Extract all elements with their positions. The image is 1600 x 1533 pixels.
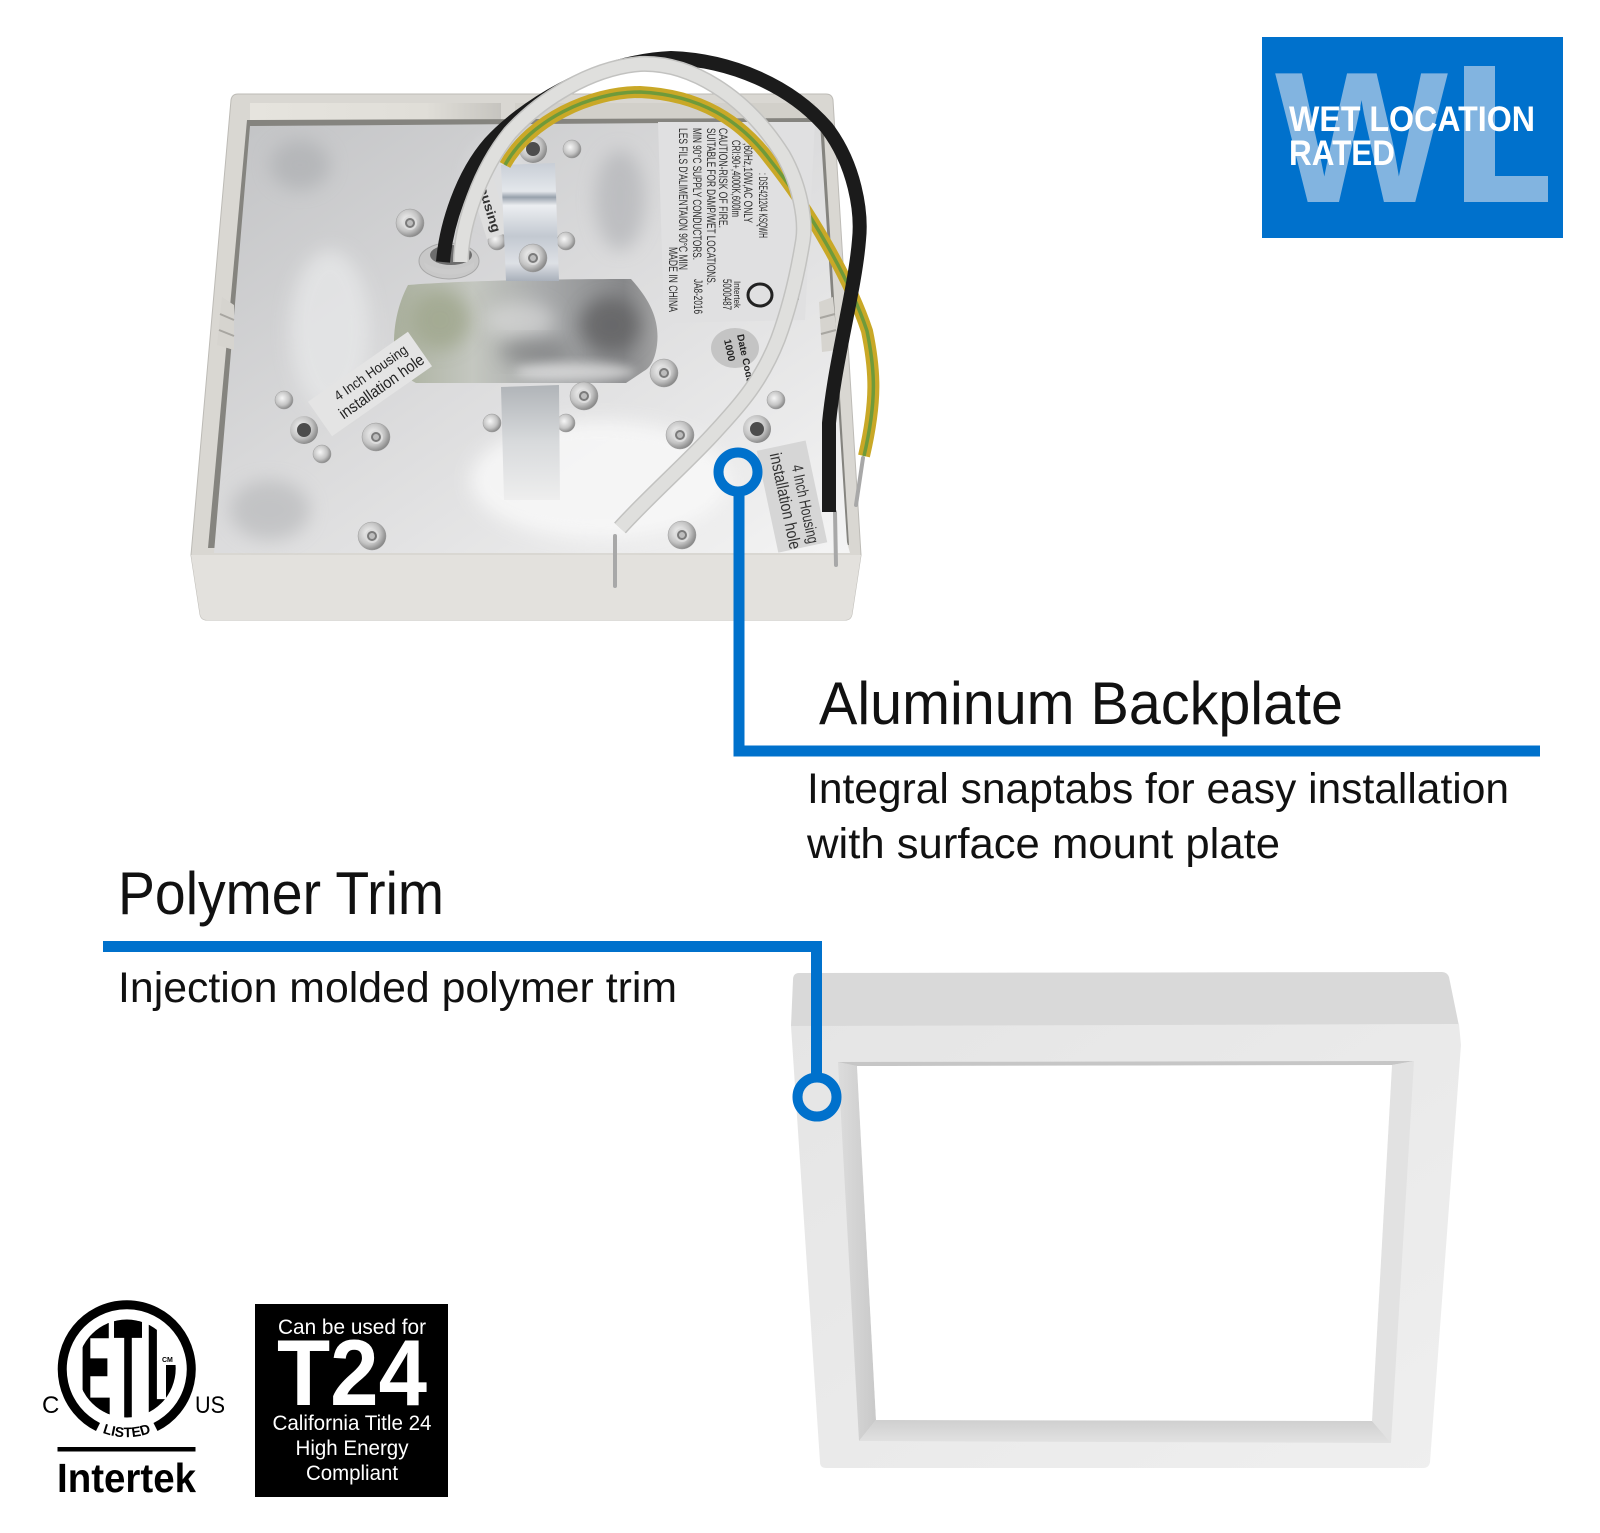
text block: trim description: Injection molded polymer trim (118, 964, 677, 1012)
sticker: partly hidden housing label (468, 171, 510, 239)
printed product label: 5000487 (720, 279, 732, 310)
inner bevel right (1372, 1061, 1414, 1443)
badge: California Title 24: Can be used for (278, 1315, 426, 1339)
badge: wet location rated: RATED (1289, 134, 1395, 173)
text block: backplate description (806, 765, 1509, 868)
printed product label: JA8-2016 (691, 279, 703, 314)
C mark: C (42, 1392, 59, 1419)
recessed opening in the plate (394, 279, 658, 383)
printed product label: ,60Hz,10W,AC ONLY (741, 143, 753, 223)
badge: ETL listed Intertek: L (146, 1292, 176, 1446)
heading: Polymer Trim: Polymer Trim (118, 860, 444, 927)
rivets (275, 135, 785, 550)
badge: wet location rated: L (1464, 33, 1548, 242)
inner bevel left (838, 1062, 876, 1441)
wire: green and yellow ground (505, 92, 873, 456)
sticker: right installation hole label: installation hole (766, 451, 805, 551)
ETL ring (62, 1305, 191, 1427)
US mark: US (195, 1392, 225, 1419)
badge: wet location rated: W (1275, 33, 1448, 242)
bare wire ends (615, 458, 863, 586)
sticker: left installation hole label: installation hole (336, 351, 428, 423)
callout marker ring (798, 1078, 836, 1116)
wire: white (461, 64, 804, 528)
sticker: right installation hole label: 4 Inch Housing (788, 463, 821, 545)
rule (58, 1447, 196, 1452)
ETL letters: E (80, 1294, 111, 1443)
sticker: partly hidden housing label: Housing (473, 174, 504, 234)
text block: backplate description: with surface mount plate (806, 820, 1280, 868)
callout marker ring (718, 452, 758, 492)
heading: Aluminum Backplate: Aluminum Backplate (819, 670, 1343, 737)
printed product label: CRI:90+,4000K,600lm (729, 140, 741, 217)
badge: wet location rated (1262, 33, 1563, 242)
badge: California Title 24: High Energy (296, 1437, 409, 1460)
ETL letters (82, 1320, 176, 1418)
sticker: right installation hole label (757, 441, 827, 553)
trim opening (857, 1065, 1392, 1421)
printed product label: MADE IN CHINA (666, 247, 678, 312)
trim front face (791, 1024, 1461, 1468)
printed product label: Intertek (731, 281, 742, 308)
text block: backplate description: Integral snaptabs for easy installation (807, 765, 1509, 813)
badge: ETL listed Intertek (42, 1300, 225, 1501)
date code sticker (711, 328, 759, 384)
clip side rivets (483, 232, 575, 432)
printed product label: SUITABLE FOR DAMP/WET LOCATIONS. (704, 128, 716, 285)
printed product label: LES FILS D'ALIMENTAION 90°C MIN (676, 128, 688, 270)
date code sticker: 1000 (721, 338, 737, 363)
badge: California Title 24: Compliant (306, 1462, 398, 1485)
upper mounting clip (501, 163, 559, 281)
badge: California Title 24 (255, 1304, 448, 1497)
LISTED arc text: LISTED (103, 1424, 150, 1438)
trim top edge (791, 972, 1459, 1026)
aluminum plate (214, 122, 850, 553)
badge: California Title 24: California Title 24 (272, 1412, 432, 1435)
printed product label (658, 122, 815, 323)
sticker: left installation hole label (308, 332, 432, 436)
date code sticker: Date Code (734, 333, 755, 384)
printed product label: CAUTION-RISK OF FIRE. (716, 128, 728, 228)
sticker: left installation hole label: 4 Inch Housing (331, 341, 410, 404)
photo: aluminum backplate housing (191, 58, 873, 620)
callout line: polymer trim (103, 946, 836, 1116)
ETL letters: T (114, 1292, 142, 1446)
badge: wet location rated: WET LOCATION (1289, 100, 1535, 139)
printed product label: : DSE421204 KSQWH (756, 173, 768, 238)
Intertek wordmark: Intertek (57, 1455, 196, 1501)
badge: California Title 24: T24 (277, 1320, 427, 1425)
printed product label: 471937 (789, 270, 800, 300)
printed product label: MIN 90°C SUPPLY CONDUCTORS. (690, 128, 702, 260)
lower mounting clip (501, 385, 560, 500)
callout line: aluminum backplate (718, 452, 1540, 751)
inner bevel bottom (859, 1420, 1391, 1443)
housing rim and walls (191, 94, 861, 620)
CM mark: CM (162, 1357, 173, 1364)
wire: black (443, 58, 860, 512)
grommet front lip (424, 262, 474, 275)
inner bevel top (838, 1061, 1414, 1066)
grommet (419, 243, 479, 279)
photo: polymer trim frame (791, 972, 1461, 1468)
front face of housing (191, 555, 861, 620)
side snap tabs (217, 297, 838, 352)
